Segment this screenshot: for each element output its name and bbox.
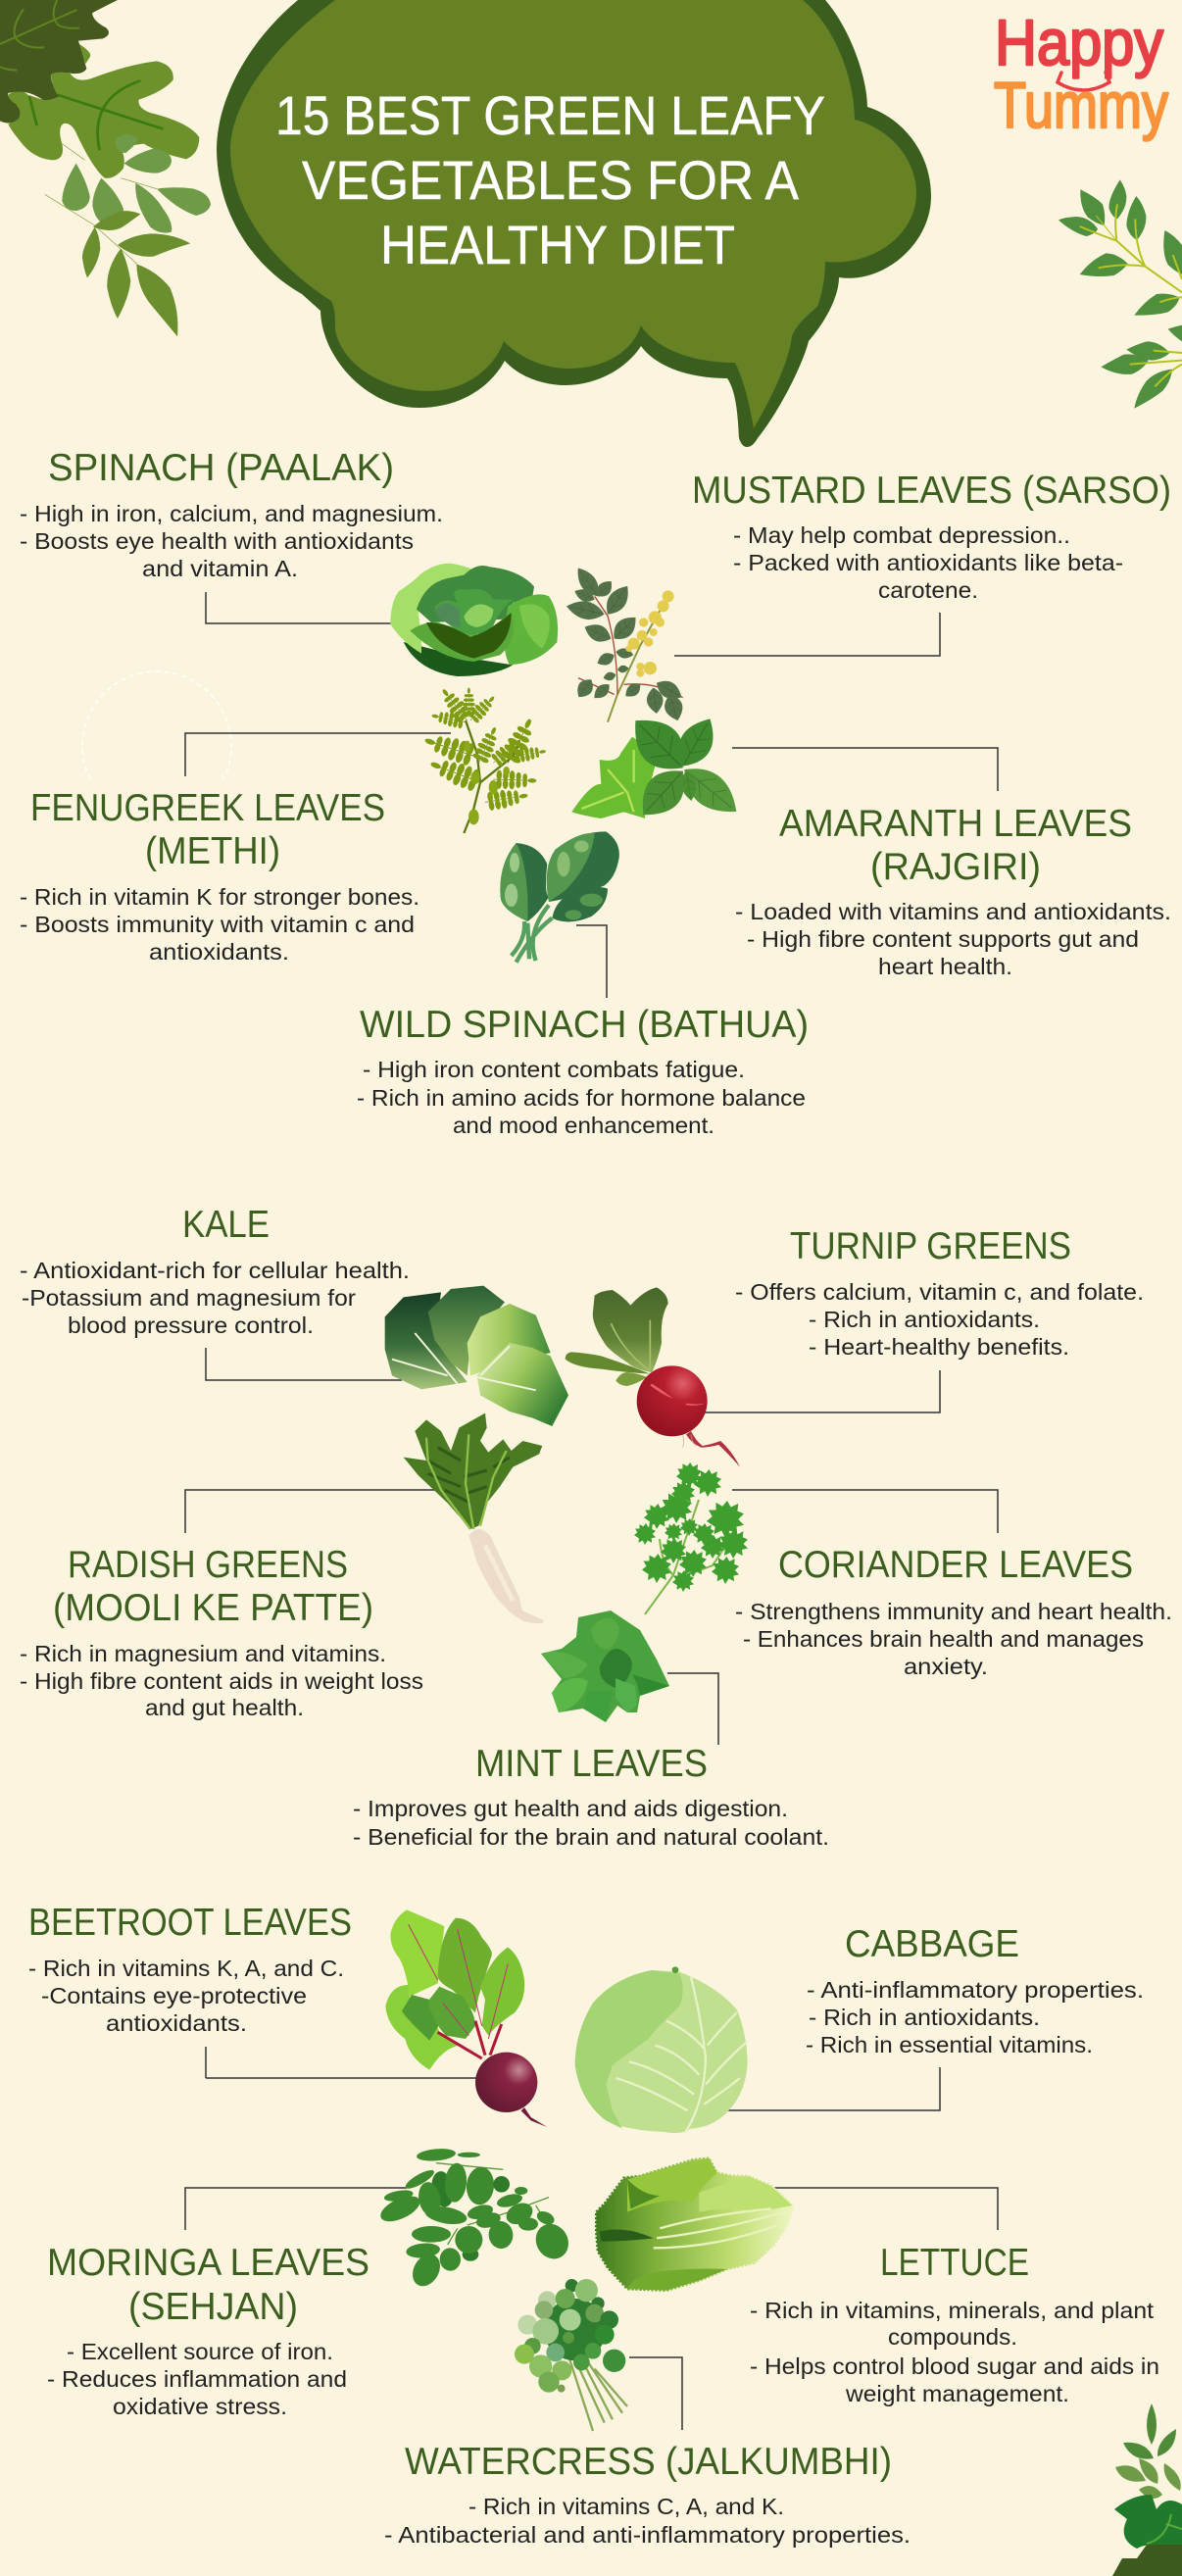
text block: - May help combat depression.. <box>733 522 1070 548</box>
text block: - Antibacterial and anti-inflammatory properties. <box>384 2522 911 2548</box>
heading: WILD SPINACH (BATHUA) <box>360 1004 809 1046</box>
connector <box>674 613 940 656</box>
panel: amaranth leaves <box>571 706 1171 979</box>
text block <box>733 522 1123 603</box>
text block: heart health. <box>878 954 1012 979</box>
heading <box>30 787 385 872</box>
title text <box>275 84 825 275</box>
panel: coriander leaves <box>634 1462 1172 1679</box>
text block: carotene. <box>878 577 978 603</box>
text block: oxidative stress. <box>113 2394 287 2419</box>
text block: - Reduces inflammation and <box>47 2366 347 2392</box>
text block <box>20 1258 410 1338</box>
text block <box>357 1057 806 1138</box>
text block: - High in iron, calcium, and magnesium. <box>20 501 443 526</box>
heading: RADISH GREENS <box>68 1544 348 1586</box>
panel: spinach <box>20 447 558 676</box>
panel: cabbage <box>575 1923 1144 2134</box>
connector <box>206 2047 478 2078</box>
text block <box>353 1796 829 1850</box>
panel: mustard leaves <box>565 470 1171 723</box>
connector <box>732 748 998 791</box>
decorative leaves: top left <box>0 0 211 336</box>
text block: antioxidants. <box>149 939 289 965</box>
text block: - High fibre content aids in weight loss <box>20 1668 423 1694</box>
heading: TURNIP GREENS <box>790 1225 1071 1267</box>
connector <box>206 1348 402 1380</box>
heading: (METHI) <box>145 830 280 872</box>
text block: - Helps control blood sugar and aids in <box>750 2353 1159 2379</box>
heading <box>53 1544 373 1629</box>
decorative leaves: bottom right <box>1112 2403 1182 2576</box>
connector <box>774 2188 998 2230</box>
text block: - Improves gut health and aids digestion. <box>353 1796 788 1821</box>
heading: BEETROOT LEAVES <box>28 1902 352 1944</box>
text block: - High iron content combats fatigue. <box>363 1057 745 1082</box>
text block: - Antioxidant-rich for cellular health. <box>20 1258 410 1283</box>
panel: radish greens <box>20 1413 544 1720</box>
text block: compounds. <box>888 2324 1017 2350</box>
text block <box>20 884 419 965</box>
text block: - Rich in vitamins, minerals, and plant <box>750 2298 1154 2323</box>
connector <box>732 1490 998 1533</box>
text block <box>735 1599 1172 1679</box>
icon: cabbage head <box>575 1966 748 2134</box>
icon: amaranth leaves <box>571 706 747 827</box>
panel: beetroot leaves <box>28 1902 547 2127</box>
icon: daikon radish <box>404 1413 544 1623</box>
heading: MORINGA LEAVES <box>47 2242 369 2284</box>
icon: spinach leaves <box>500 831 619 963</box>
text block: - Rich in essential vitamins. <box>806 2032 1093 2057</box>
logo: Happy Tummy <box>994 6 1168 141</box>
text block: - Loaded with vitamins and antioxidants. <box>735 899 1171 924</box>
text block: - Enhances brain health and manages <box>743 1626 1144 1652</box>
panel: mint leaves <box>353 1610 829 1850</box>
icon: watercress <box>515 2279 627 2431</box>
heading <box>779 803 1132 888</box>
text block: - Boosts eye health with antioxidants <box>20 528 414 554</box>
title text: 15 BEST GREEN LEAFY <box>275 84 825 146</box>
icon: coriander <box>634 1462 748 1614</box>
text block: - Offers calcium, vitamin c, and folate. <box>735 1279 1144 1305</box>
text block: and gut health. <box>145 1695 304 1720</box>
text block: - Rich in vitamins C, A, and K. <box>468 2494 784 2519</box>
panel: kale <box>20 1204 568 1426</box>
text block: - High fibre content supports gut and <box>747 926 1139 952</box>
text block: - Rich in vitamins K, A, and C. <box>28 1956 344 1981</box>
faint dashed circle <box>82 671 231 779</box>
icon: lettuce <box>596 2158 794 2291</box>
connector <box>629 2357 682 2430</box>
text block <box>735 899 1171 979</box>
icon: kale leaves <box>385 1286 568 1426</box>
connector <box>667 1673 718 1745</box>
text block: - Rich in amino acids for hormone balance <box>357 1085 806 1111</box>
heading: MINT LEAVES <box>475 1743 708 1785</box>
panel: lettuce <box>596 2158 1159 2406</box>
heading: FENUGREEK LEAVES <box>30 787 385 829</box>
text block <box>384 2494 911 2548</box>
heading: AMARANTH LEAVES <box>779 803 1132 845</box>
icon: mustard plant <box>565 564 686 723</box>
text block <box>47 2339 347 2419</box>
text block: - Strengthens immunity and heart health. <box>735 1599 1172 1624</box>
text block: - Anti-inflammatory properties. <box>807 1977 1144 2003</box>
decorative leaves: top right <box>1059 179 1182 409</box>
text block: antioxidants. <box>106 2010 247 2036</box>
text block: - Rich in magnesium and vitamins. <box>20 1641 386 1666</box>
panel: fenugreek leaves <box>20 684 547 965</box>
panel: watercress <box>384 2279 911 2548</box>
text block: - Packed with antioxidants like beta- <box>733 550 1123 575</box>
panel: turnip greens <box>566 1225 1144 1467</box>
icon: beetroot <box>385 1909 547 2127</box>
connector <box>185 733 451 776</box>
title speech bubble <box>217 0 931 447</box>
text block: - Rich in antioxidants. <box>809 1307 1040 1332</box>
text block: - Rich in antioxidants. <box>809 2005 1040 2030</box>
connector <box>576 925 607 998</box>
text block: - Beneficial for the brain and natural coolant. <box>353 1824 829 1850</box>
heading: (RAJGIRI) <box>870 846 1041 888</box>
icon: moringa <box>376 2148 574 2291</box>
icon: spinach head <box>390 564 558 676</box>
text block: -Contains eye-protective <box>41 1983 307 2008</box>
heading: (MOOLI KE PATTE) <box>53 1587 373 1629</box>
heading: SPINACH (PAALAK) <box>48 447 394 489</box>
heading: (SEHJAN) <box>128 2286 298 2328</box>
text block: -Potassium and magnesium for <box>22 1285 356 1311</box>
text block: - Boosts immunity with vitamin c and <box>20 912 415 937</box>
heading: CORIANDER LEAVES <box>778 1544 1133 1586</box>
heading <box>47 2242 369 2328</box>
text block <box>750 2298 1159 2406</box>
panel: wild spinach <box>357 831 809 1138</box>
connector <box>206 592 392 623</box>
icon: turnip <box>566 1287 740 1467</box>
heading: KALE <box>182 1204 270 1246</box>
connector <box>185 2188 407 2230</box>
title text: HEALTHY DIET <box>380 214 735 275</box>
logo: Happy Tummy: Happy <box>995 6 1163 78</box>
text block <box>20 1641 423 1720</box>
text block <box>806 1977 1144 2057</box>
text block: and vitamin A. <box>142 556 298 581</box>
text block: blood pressure control. <box>68 1313 314 1338</box>
title text: VEGETABLES FOR A <box>302 149 800 211</box>
text block: - Excellent source of iron. <box>67 2339 333 2364</box>
heading: WATERCRESS (JALKUMBHI) <box>405 2441 892 2483</box>
heading: LETTUCE <box>880 2242 1029 2284</box>
heading: CABBAGE <box>845 1923 1019 1965</box>
icon: mint <box>541 1610 669 1722</box>
text block <box>20 501 443 581</box>
icon: fenugreek plant <box>421 684 547 833</box>
text block <box>735 1279 1144 1360</box>
text block: weight management. <box>845 2381 1069 2406</box>
connector <box>727 2067 940 2110</box>
panel: moringa leaves <box>47 2148 574 2419</box>
text block: - Rich in vitamin K for stronger bones. <box>20 884 419 910</box>
text block: - Heart-healthy benefits. <box>809 1334 1069 1360</box>
connector <box>705 1370 940 1412</box>
text block: and mood enhancement. <box>453 1113 714 1138</box>
text block <box>28 1956 344 2036</box>
text block: anxiety. <box>904 1654 988 1679</box>
connector <box>185 1490 437 1533</box>
